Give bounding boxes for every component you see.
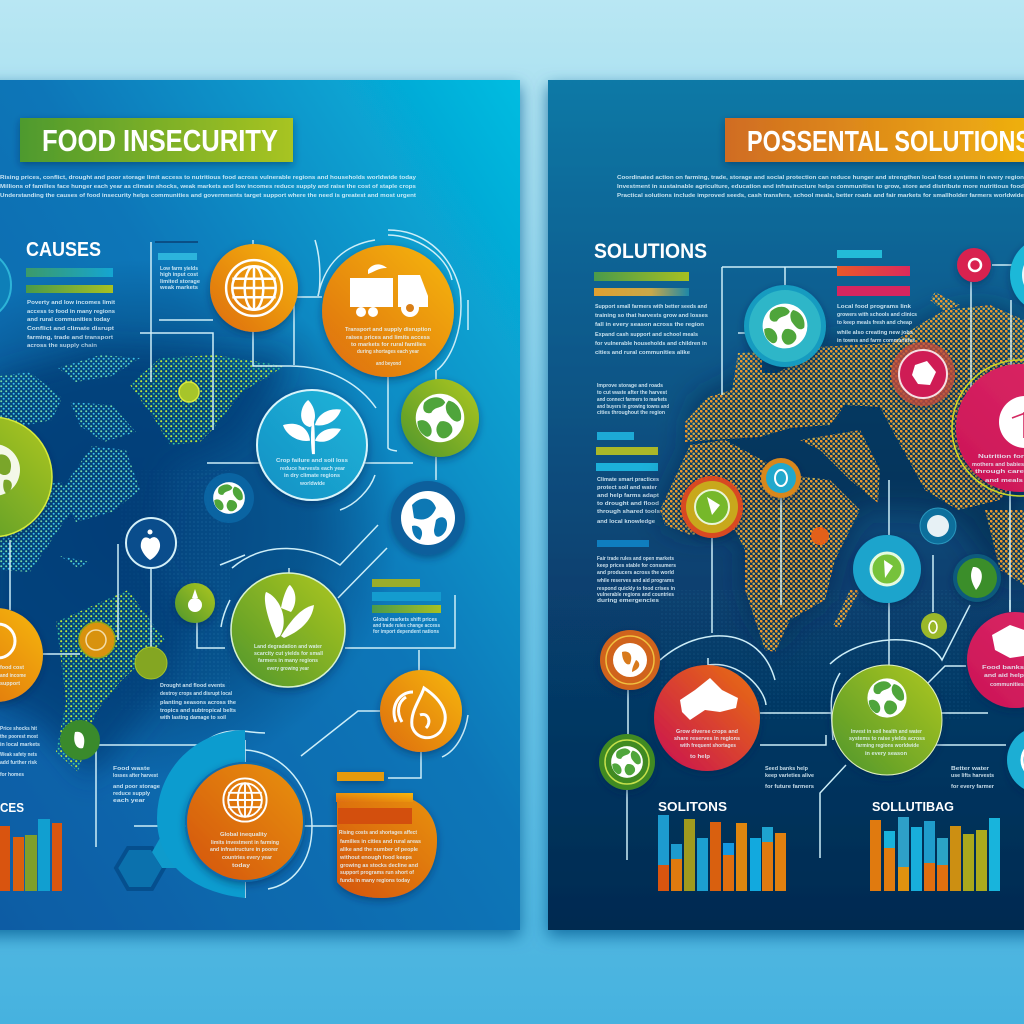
text below color bars: to drought and flood — [597, 501, 659, 507]
blue bar — [597, 540, 649, 547]
circle: dark globe right — [391, 481, 465, 555]
circle: green globe — [401, 379, 479, 457]
document text: support programs run short of — [340, 870, 414, 876]
green globe text — [849, 729, 925, 757]
causes text lower left — [0, 726, 40, 778]
banner: food insecurity: FOOD INSECURITY — [42, 123, 278, 158]
circle: orange wire globe — [210, 244, 298, 332]
big pink text: Nutrition for — [978, 454, 1024, 460]
big pink text — [972, 454, 1024, 484]
stacked bars text: for import dependent nations — [373, 629, 439, 635]
small text under circles right: for every farmer — [951, 784, 994, 790]
hex decoration — [116, 838, 198, 889]
left orange text: food cost — [0, 665, 24, 671]
small text under circles: Seed banks help — [765, 766, 808, 772]
green leaf text: every growing year — [267, 666, 309, 672]
text below blue bar: vulnerable regions and countries — [597, 592, 674, 598]
causes text — [27, 300, 115, 349]
circle: top right cyan — [1010, 237, 1024, 313]
text block right: and buyers in growing towns and — [597, 404, 669, 410]
text below blue bar: keep prices stable for consumers — [597, 563, 676, 569]
green globe text: farming regions worldwide — [856, 743, 919, 749]
circle: right pink — [967, 612, 1024, 708]
solutions text: Support small farmers with better seeds and — [595, 304, 707, 310]
red orange text: to help — [690, 754, 710, 760]
right pink text: Food banks — [982, 665, 1024, 671]
circle: green small dark — [953, 554, 1001, 602]
small text under circles: for future farmers — [765, 784, 814, 790]
document: orange — [336, 772, 437, 898]
circle: cyan marker — [761, 458, 801, 498]
text below blue bar — [596, 556, 676, 604]
plant circle text: in dry climate regions — [284, 473, 340, 479]
side bars text — [159, 266, 200, 291]
red orange text: Grow diverse crops and — [676, 729, 738, 735]
text: top middle: Local food programs link — [837, 304, 911, 310]
causes text: farming, trade and transport — [27, 335, 113, 341]
red orange text: share reserves in regions — [674, 736, 740, 742]
panel background right — [548, 80, 1024, 930]
circle: small dark globe — [204, 473, 254, 523]
bar chart left — [0, 819, 62, 891]
small text under circles right — [951, 766, 994, 790]
stacked bars text: and trade rules change access — [373, 623, 440, 629]
left orange text: and income — [0, 673, 26, 679]
orange globe text: Global inequality — [220, 832, 267, 838]
text below color bars: and help farms adapt — [597, 493, 659, 499]
side bars text: high input cost — [160, 272, 198, 278]
text block small: losses after harvest — [113, 773, 158, 779]
right pink text — [982, 665, 1024, 688]
text block middle: tropics and subtropical belts — [160, 708, 236, 714]
text below color bars — [597, 477, 660, 525]
document text: growing as stocks decline and — [340, 863, 418, 869]
red orange text — [674, 729, 740, 760]
connector lines left — [10, 240, 455, 898]
truck circle text: and beyond — [376, 361, 401, 367]
side bars text: Low farm yields — [160, 266, 198, 272]
halftone grid — [120, 470, 230, 710]
circle: top small red — [957, 248, 991, 282]
truck circle text — [345, 327, 431, 367]
marker: small green — [921, 613, 947, 639]
causes text: Poverty and low incomes limit — [27, 300, 115, 306]
text: top middle: to keep meals fresh and cheap — [837, 320, 912, 326]
causes text: access to food in many regions — [27, 309, 115, 315]
text block right: to cut waste after the harvest — [597, 390, 667, 396]
text block middle: Drought and flood events — [160, 683, 225, 689]
circle: small green apple — [175, 583, 215, 623]
causes text lower left: Weak safety nets — [0, 752, 37, 758]
bar chart heading 1: SOLITONS — [658, 799, 727, 814]
orange globe text: and infrastructure in poorer — [210, 847, 278, 853]
text block middle: planting seasons across the — [160, 700, 236, 706]
circle: teal leaf — [853, 535, 921, 603]
document text: families in cities and rural areas — [340, 839, 421, 845]
text: top middle: while also creating new jobs — [836, 330, 913, 336]
left orange text — [0, 665, 26, 687]
text block right: and connect farmers to markets — [597, 397, 667, 403]
panel background left — [0, 80, 520, 930]
text block middle — [159, 683, 236, 721]
green globe text: in every season — [865, 751, 907, 757]
text block small: reduce supply — [113, 791, 150, 797]
intro text right — [617, 175, 1024, 199]
icon: tulip leaves — [265, 585, 314, 638]
stacked bars text — [373, 617, 440, 635]
text block right — [597, 383, 669, 416]
causes text lower left: in local markets — [0, 742, 40, 748]
green leaf text — [254, 644, 324, 672]
map marker: dark green — [60, 720, 100, 760]
solutions text: Expand cash support and school meals — [595, 332, 698, 338]
map marker: orange — [79, 622, 115, 658]
plant circle text: Crop failure and soil loss — [276, 458, 348, 464]
truck circle text: raises prices and limits access — [346, 335, 430, 341]
solutions bars — [594, 272, 689, 296]
intro text — [0, 175, 416, 199]
orange globe text: today — [232, 863, 250, 869]
small text under circles right: use lifts harvests — [951, 773, 994, 779]
stacked bars text: Global markets shift prices — [373, 617, 437, 623]
causes text: Conflict and climate disrupt — [27, 326, 114, 332]
text: top middle: in towns and farm communities — [837, 338, 915, 344]
left orange text: support — [0, 681, 20, 687]
text below color bars: Climate smart practices — [597, 477, 659, 483]
solutions text — [595, 304, 708, 356]
circle: left edge orange — [0, 608, 43, 702]
banner: potential solutions — [725, 118, 1024, 162]
text block right: Improve storage and roads — [597, 383, 663, 389]
orange globe text: countries every year — [222, 855, 272, 861]
document text: without enough food keeps — [339, 855, 412, 861]
big pink text: mothers and babies — [972, 462, 1024, 468]
circle: orange truck — [322, 245, 454, 377]
panel: potential solutions — [548, 80, 1024, 930]
solutions text: fall in every season across the region — [595, 322, 704, 328]
small text under circles: keep varieties alive — [765, 773, 814, 779]
solutions text: cities and rural communities alike — [595, 350, 690, 356]
document text: funds in many regions today — [340, 878, 410, 884]
text block small — [113, 766, 160, 804]
right pink text: and aid help — [984, 673, 1024, 679]
green leaf text: scarcity cut yields for small — [254, 651, 324, 657]
green leaf text: farmers in many regions — [258, 658, 318, 664]
document text: Rising costs and shortages affect — [339, 830, 417, 836]
bar chart heading 2: SOLLUTIBAG — [872, 799, 954, 814]
text below color bars: protect soil and water — [597, 485, 657, 491]
circle: teal plant — [257, 390, 367, 500]
side bars upper — [155, 241, 198, 260]
text below blue bar: during emergencies — [597, 598, 659, 604]
heading: solutions: SOLUTIONS — [594, 240, 707, 263]
small text under circles right: Better water — [951, 766, 989, 772]
ring: blue sector — [157, 730, 245, 898]
marker: orange — [811, 527, 829, 545]
text below blue bar: and producers across the world — [597, 570, 674, 576]
circle: left edge green — [0, 417, 52, 537]
map: dotted world left — [0, 350, 290, 780]
circle: green ring left — [599, 734, 655, 790]
halftone grid right — [660, 590, 970, 720]
dark map backdrop — [0, 260, 520, 820]
solutions text: training so that harvests grow and losses — [595, 313, 708, 319]
red orange text: with frequent shortages — [679, 743, 736, 749]
circle: orange drop — [380, 670, 462, 752]
circle: left edge teal — [0, 249, 11, 321]
right pink text: communities — [990, 682, 1024, 688]
text below blue bar: respond quickly to food crises in — [597, 586, 675, 592]
side bars text: limited storage — [160, 279, 200, 285]
map: dotted world right — [660, 292, 1024, 652]
intro text right: Coordinated action on farming, trade, storage and social protection can reduce hunger and strengthen local food systems in every region — [617, 175, 1024, 181]
big pink text: through care — [975, 469, 1024, 475]
causes text: and rural communities today — [27, 317, 110, 323]
panel: food insecurity — [0, 80, 520, 930]
bar chart 2 — [870, 817, 1000, 891]
decorative arcs left — [200, 230, 468, 889]
text below color bars: and local knowledge — [597, 519, 655, 525]
causes text lower left: add further risk — [0, 760, 37, 766]
causes text lower left: for homes — [0, 772, 24, 778]
bars: top middle — [837, 250, 910, 296]
circle: orange ring left — [600, 630, 660, 690]
plant circle text: reduce harvests each year — [280, 466, 345, 472]
circle: big pink — [952, 360, 1024, 496]
text block middle: destroy crops and disrupt local — [160, 691, 233, 697]
plant circle text: worldwide — [299, 481, 325, 487]
text below color bars: through shared tools — [597, 509, 660, 515]
causes bars — [26, 268, 113, 293]
text block small: each year — [113, 798, 145, 804]
document text — [339, 830, 421, 884]
bar chart left label: CES — [0, 800, 24, 815]
text block right: cities throughout the region — [597, 410, 665, 416]
text block small: and poor storage — [113, 784, 160, 790]
causes text: across the supply chain — [27, 343, 97, 349]
intro text: Millions of families face hunger each year as climate shocks, weak markets and low incomes reduce supply and raise the cost of staple crops — [0, 184, 416, 190]
intro text right: Investment in sustainable agriculture, education and infrastructure helps communities to grow, store and distribute more nutritious food — [617, 184, 1024, 190]
document text: alike and the number of people — [340, 847, 418, 853]
intro text: Understanding the causes of food insecurity helps communities and governments target support where the need is greatest and most urgent — [0, 193, 416, 199]
connector lines right — [627, 265, 1012, 860]
intro text: Rising prices, conflict, drought and poor storage limit access to nutritious food across vulnerable regions and households worldwide today — [0, 175, 416, 181]
truck circle text: Transport and supply disruption — [345, 327, 431, 333]
text block small: Food waste — [113, 766, 150, 772]
text below blue bar: Fair trade rules and open markets — [597, 556, 674, 562]
text: top middle: growers with schools and clinics — [837, 312, 917, 318]
causes text lower left: the poorest most — [0, 734, 38, 740]
circle: dark teal small — [920, 508, 956, 544]
circle: green leaf — [231, 573, 345, 687]
heading: causes: CAUSES — [26, 239, 101, 261]
circle: heart marker — [126, 518, 176, 568]
circle: orange globe — [185, 762, 305, 882]
circle: teal globe — [744, 285, 826, 367]
small map marker — [179, 382, 199, 402]
small text under circles — [765, 766, 814, 790]
text block middle: with lasting damage to soil — [159, 715, 227, 721]
color bars right — [596, 432, 658, 471]
text: top middle — [836, 304, 917, 344]
circle: africa multicolor — [681, 476, 743, 538]
circle: red orange — [654, 665, 760, 771]
orange globe text: limits investment in farming — [211, 840, 279, 846]
orange globe text — [210, 832, 279, 869]
text below blue bar: while reserves and aid programs — [596, 578, 674, 584]
big pink text: and meals — [985, 478, 1023, 484]
icon: truck — [350, 264, 428, 317]
green globe text: Invest in soil health and water — [851, 729, 922, 735]
banner: food insecurity — [20, 118, 293, 162]
green leaf text: Land degradation and water — [254, 644, 322, 650]
circle: right cyan — [1007, 727, 1024, 793]
stacked bars near leaf — [372, 579, 441, 613]
map marker: green — [135, 647, 167, 679]
solutions text: for vulnerable households and children in — [595, 341, 707, 347]
circle: pink ring — [891, 342, 955, 406]
plant circle text — [276, 458, 348, 487]
causes text lower left: Price shocks hit — [0, 726, 37, 732]
intro text right: Practical solutions include improved seeds, cash transfers, school meals, better roads and fair markets for smallholder farmers worldwide — [617, 193, 1024, 199]
circle: green globe large — [832, 665, 942, 775]
truck circle text: to markets for rural families — [351, 342, 426, 348]
truck circle text: during shortages each year — [357, 349, 419, 355]
side bars text: weak markets — [159, 285, 198, 291]
green globe text: systems to raise yields across — [849, 736, 925, 742]
icon: grain cluster — [680, 678, 738, 720]
bar chart 1 — [658, 815, 786, 891]
